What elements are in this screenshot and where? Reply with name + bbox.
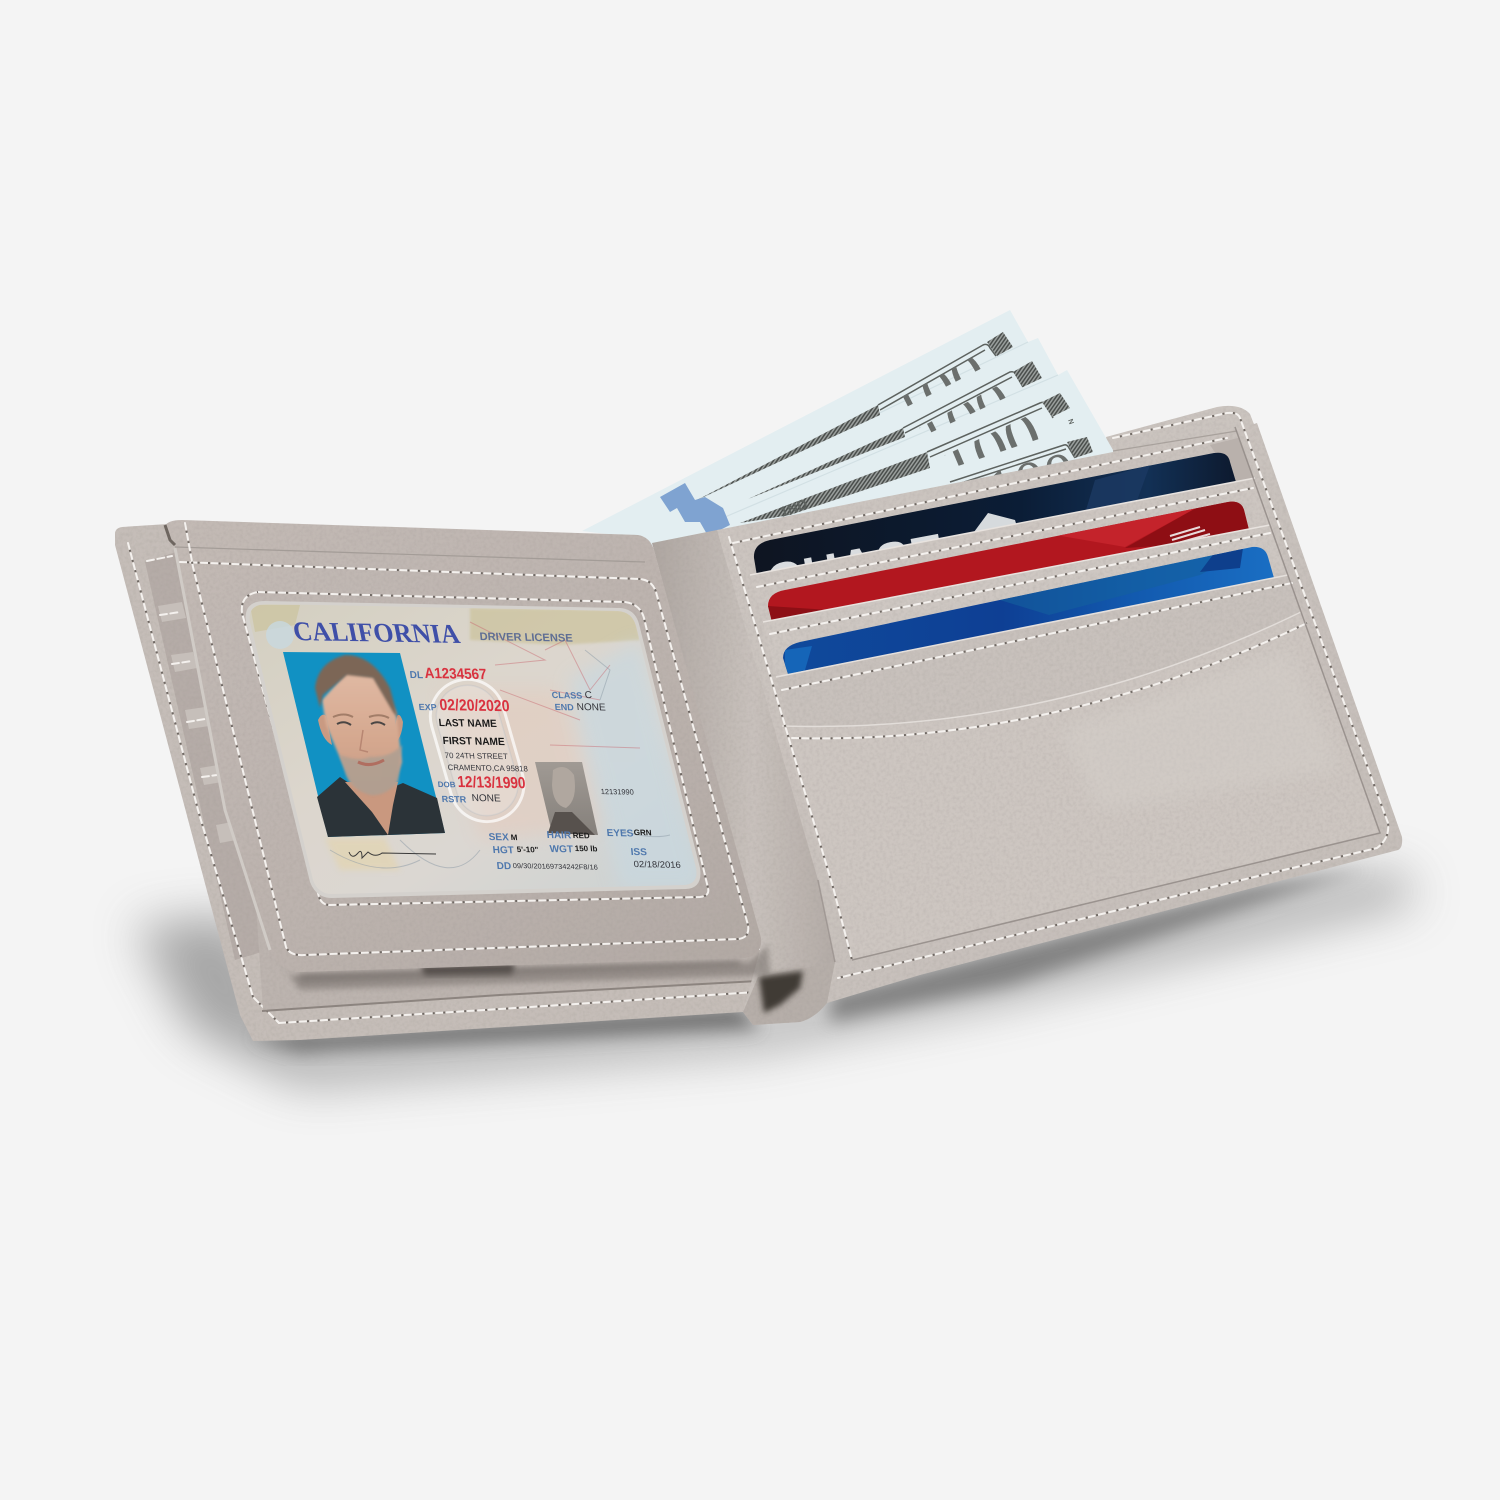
eyes (337, 722, 385, 725)
field labels: HAIR (546, 830, 572, 841)
pale blue wash (575, 649, 692, 881)
inner pocket below flap (256, 905, 760, 1011)
navy card (754, 452, 1236, 573)
note 4 engraving: 100 (979, 439, 1083, 526)
field labels: HGT (492, 845, 515, 856)
chase wordmark: CHASE (762, 521, 950, 616)
pocket 4 (776, 575, 1380, 960)
left panel stitching (128, 543, 756, 1023)
flap stitching (180, 523, 748, 955)
lips (358, 760, 384, 765)
field labels: END (554, 702, 575, 712)
hologram oval (428, 678, 526, 823)
field labels: NONE (471, 793, 501, 805)
nose (360, 730, 368, 752)
pocket backings (1210, 438, 1288, 578)
field labels: RSTR (441, 794, 467, 804)
red card (768, 502, 1249, 620)
license label: DRIVER LICENSE (479, 631, 573, 645)
shirt (317, 777, 445, 837)
note 3 engraving: 1ND (778, 496, 809, 520)
beard (340, 745, 402, 795)
note 1 engraving (697, 332, 1013, 500)
panel top seam (1113, 431, 1237, 451)
peach wash (462, 696, 576, 834)
card pattern (1086, 466, 1150, 510)
field labels: 02/20/2020 (439, 696, 510, 715)
left outer panel (115, 524, 762, 1041)
tan stain (325, 838, 400, 870)
california driver license (245, 600, 705, 900)
window stitching (242, 592, 708, 905)
note 1 engraving: 100 (879, 336, 1000, 446)
right panel base (717, 423, 1402, 1025)
id flap (165, 520, 770, 990)
top hatch band (470, 608, 640, 645)
spine (652, 530, 835, 977)
field labels: 09/30/20169734242F8/16 (513, 863, 598, 872)
card stripes (1170, 527, 1210, 543)
card darker fold (1125, 502, 1249, 548)
field labels: RED (572, 831, 590, 840)
field labels: DL (409, 670, 424, 681)
note 2 engraving (748, 361, 1042, 499)
field labels: SEX (488, 832, 510, 843)
field labels: 150 lb (574, 844, 598, 853)
map contour lines (330, 650, 670, 868)
slot bars (158, 602, 236, 843)
field labels: A1234567 (424, 665, 487, 683)
field labels: LAST NAME (438, 717, 497, 730)
pocket 2 (750, 478, 1380, 960)
field labels: EYES (606, 828, 634, 839)
spine fold (743, 962, 835, 1025)
brows (333, 714, 389, 718)
face (322, 672, 402, 795)
pocket 3 (763, 525, 1380, 960)
card facets (1000, 554, 1218, 615)
field labels: NONE (576, 702, 606, 714)
note edge shading (693, 342, 1058, 517)
field labels: CLASS (551, 690, 583, 701)
wallet shadow (135, 868, 1420, 1085)
chase logo (974, 513, 1018, 532)
note 3 engraving (740, 393, 1074, 523)
note 3 engraving: 100 (929, 395, 1053, 505)
field labels: 12131990 (600, 787, 634, 797)
banknotes (582, 310, 1116, 560)
note 2 engraving: 100 (904, 365, 1025, 475)
field labels: 02/18/2016 (633, 859, 681, 870)
blue card (783, 546, 1274, 674)
state title: CALIFORNIA (290, 616, 462, 649)
left panel card slots (145, 552, 268, 960)
panel stitching top band (733, 438, 1227, 543)
id window frame (246, 601, 700, 898)
state map outline (470, 622, 640, 748)
field labels: DD (496, 861, 512, 872)
seal (266, 621, 294, 649)
ears (318, 715, 403, 745)
field labels: WGT (549, 844, 574, 855)
field labels: 5'-10" (516, 845, 539, 854)
right panel seam (852, 427, 1380, 960)
signature (349, 851, 436, 858)
blue currency strap (660, 483, 730, 536)
neck (345, 782, 398, 835)
field labels (409, 665, 681, 872)
note stack paper (582, 310, 1116, 560)
field labels: ISS (630, 847, 648, 858)
spine seam (818, 880, 835, 962)
portrait blue background (283, 652, 445, 837)
field labels: EXP (418, 702, 437, 712)
large front pocket (782, 612, 1380, 960)
flap edge highlight (175, 548, 270, 950)
portrait (283, 652, 445, 837)
ghost portrait (535, 762, 598, 835)
field labels: CRAMENTO,CA 95818 (447, 763, 529, 773)
field labels: DOB (437, 780, 456, 789)
field labels: FIRST NAME (442, 735, 505, 748)
field labels: 70 24TH STREET (444, 751, 508, 761)
spine gap (759, 971, 803, 1013)
right panel stitching (729, 413, 1388, 978)
flap notch (165, 525, 175, 545)
field labels: 12/13/1990 (457, 773, 526, 792)
field labels: C (584, 690, 593, 701)
field labels: GRN (633, 828, 652, 837)
wallet back panel (1106, 406, 1262, 475)
card background (250, 604, 372, 678)
hair (315, 655, 398, 718)
flap fold line (175, 547, 645, 562)
field labels: M (510, 833, 518, 842)
note 3 engraving: N (1066, 418, 1074, 425)
